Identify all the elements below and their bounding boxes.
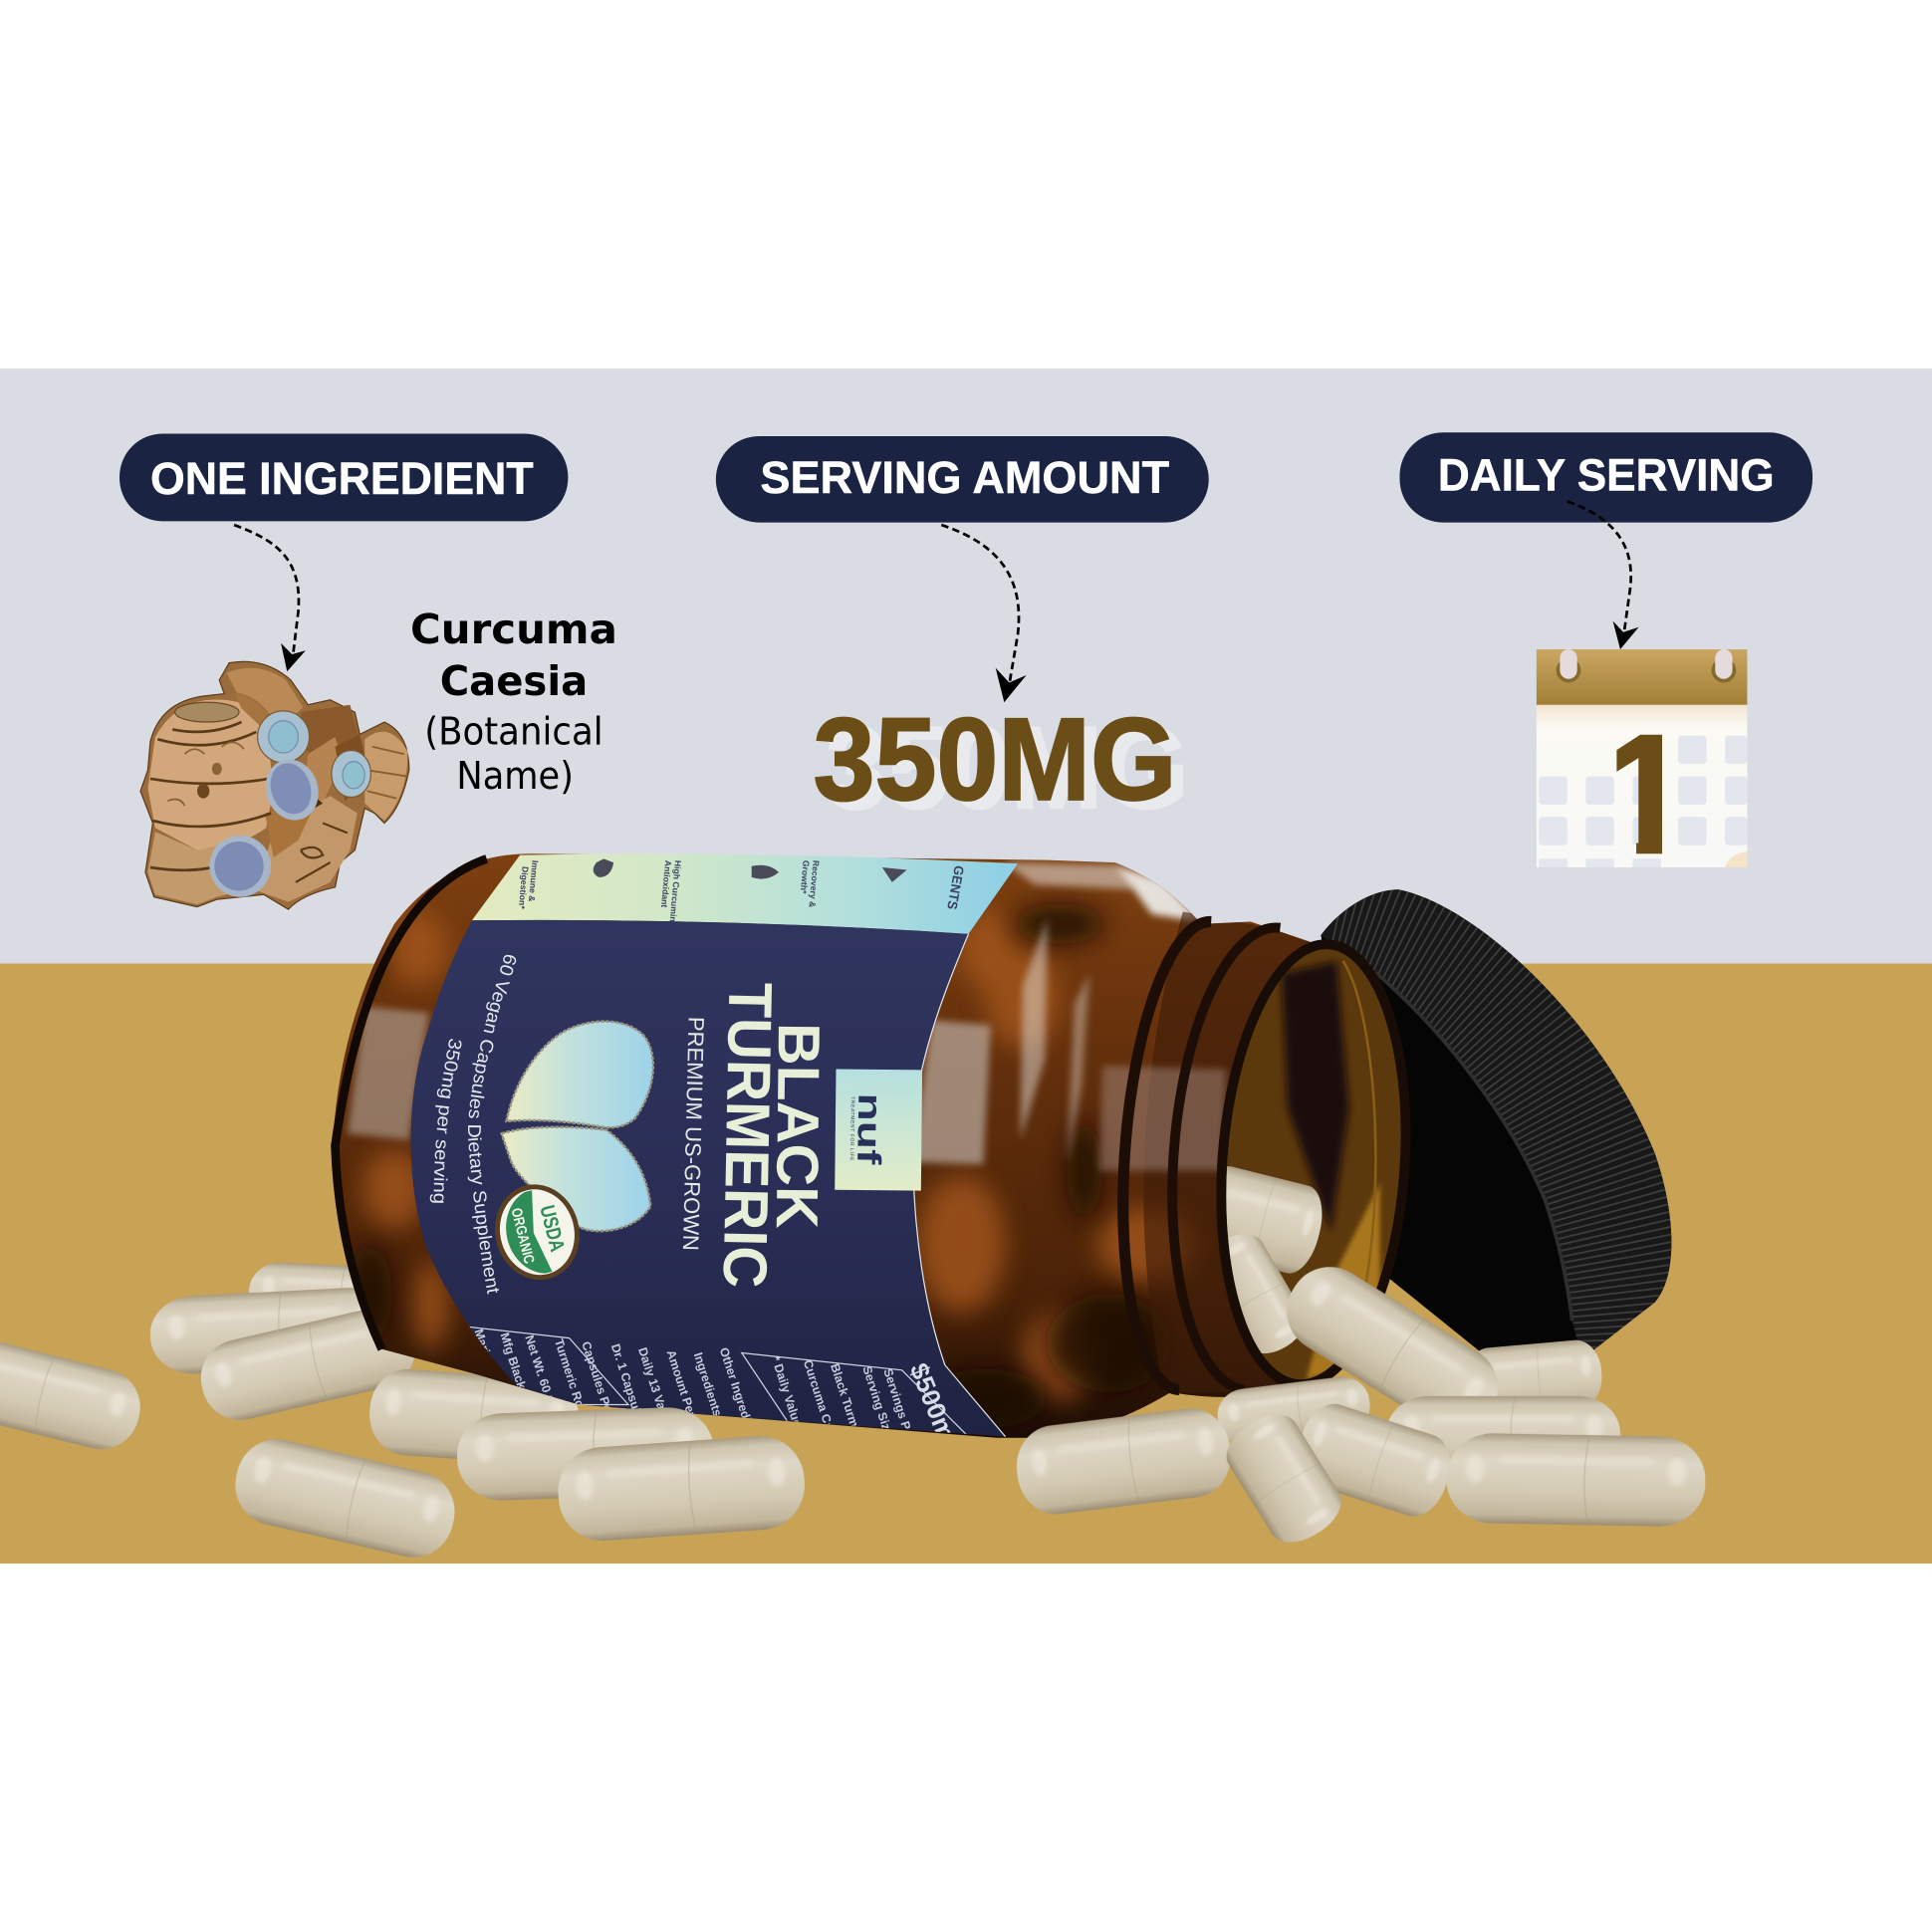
brand box	[835, 1069, 922, 1191]
label navy panel	[410, 920, 1006, 1437]
label light band	[472, 853, 1018, 934]
pill heading: one ingredient	[120, 434, 568, 521]
supplement facts text: Net Wt. 60 Caps	[522, 1333, 564, 1426]
botanical name text: (Botanical	[424, 709, 604, 754]
infographic canvas	[0, 368, 1932, 1564]
supplement facts text: Amount Per Serving	[663, 1348, 714, 1465]
grey background band	[0, 368, 1932, 965]
pill heading: serving amount: SERVING AMOUNT	[760, 452, 1169, 503]
dose per serving line: 350mg per serving	[430, 1039, 462, 1203]
label light band: GENTS	[944, 864, 967, 910]
lower fingers	[254, 796, 358, 902]
bottle mouth	[1216, 940, 1410, 1384]
brand box: TREATMENT FOR LIFE	[848, 1096, 855, 1161]
supplement facts text: Capsules Per Day	[579, 1339, 624, 1443]
rhizome cut disc 2	[258, 753, 326, 828]
botanical name text: Name)	[456, 754, 574, 799]
supplement facts text: Turmeric Root Powder	[552, 1337, 605, 1466]
arrow: to dose	[941, 525, 1027, 702]
capsule count and dietary line: 60 Vegan Capsules Dietary Supplement	[468, 954, 516, 1295]
tuber cracks	[150, 722, 271, 870]
botanical name text	[410, 605, 617, 799]
label light band: Digestion*	[517, 866, 531, 910]
arrow: to rhizome	[234, 525, 306, 671]
supplement facts text	[469, 1327, 967, 1434]
label light band: Growth*	[799, 859, 812, 894]
product name: BLACK	[764, 1023, 833, 1229]
supplement facts text: Other Ingredients	[717, 1345, 762, 1448]
product name	[710, 982, 833, 1289]
turmeric slice butterfly	[502, 1022, 653, 1231]
amber glass bottle	[281, 853, 1454, 1541]
panel: one ingredient	[120, 434, 617, 909]
botanical name text: Caesia	[440, 657, 588, 705]
USDA organic seal: USDA	[535, 1203, 569, 1254]
icon: black turmeric rhizome	[140, 661, 409, 909]
dose value: 350MG	[826, 703, 1189, 834]
supplement facts text: Curcuma Caesia	[801, 1358, 844, 1454]
gold background band	[0, 964, 1932, 1564]
supplement facts text: Mfg Black Turmeric	[497, 1331, 546, 1443]
neck shading	[1143, 912, 1319, 1392]
product label	[410, 854, 1018, 1437]
product name: TURMERIC	[710, 982, 784, 1289]
panel: daily serving	[1400, 432, 1812, 902]
rhizome silhouette	[140, 661, 409, 909]
icon: calendar with number 1	[1536, 649, 1747, 867]
supplement facts text: Black Turmeric Root	[828, 1361, 877, 1480]
supplement facts text: $500mg	[904, 1358, 968, 1459]
botanical name text: Curcuma	[410, 605, 617, 653]
icon: calendar with number 1: 1	[1596, 696, 1699, 902]
pill heading: serving amount	[716, 436, 1209, 523]
supplement facts text: Servings Per Container	[880, 1366, 936, 1501]
label light band: High Curcumin	[668, 859, 683, 922]
dose value: 350MG	[814, 694, 1177, 825]
glass reflections	[348, 862, 1201, 1164]
label light band: Recovery &	[807, 859, 822, 908]
supplement facts text: Marine Extract 1 Daily	[471, 1328, 525, 1453]
rhizome cut disc 1	[258, 711, 310, 763]
glass body	[321, 845, 1330, 1448]
label light band: Immune &	[527, 859, 540, 902]
supplement facts text: Dr. 1 Capsule	[608, 1342, 645, 1421]
supplement facts text: Ingredients Vegetable	[691, 1350, 744, 1476]
arrow: to calendar	[1568, 502, 1639, 649]
supplement facts text: * Daily Value	[769, 1354, 805, 1428]
brand box: nuf	[849, 1092, 887, 1166]
pill heading: daily serving: DAILY SERVING	[1438, 449, 1775, 500]
capsules behind bottle, left	[148, 1261, 582, 1467]
capsules inside mouth	[1226, 1166, 1323, 1354]
label light band: Antioxidant	[659, 859, 673, 908]
supplement facts text: Serving Size 1 Capsule	[859, 1364, 914, 1497]
USDA organic seal	[485, 1175, 590, 1289]
pill heading: daily serving	[1400, 432, 1812, 523]
pill heading: one ingredient: ONE INGREDIENT	[150, 453, 534, 504]
tagline: PREMIUM US-GROWN	[678, 1017, 709, 1251]
base rim	[336, 858, 487, 1349]
panel: serving amount	[716, 436, 1209, 834]
rhizome cut disc 4	[209, 836, 271, 897]
upper fingers	[301, 705, 360, 767]
supplement facts text: Daily 13 Value	[635, 1345, 674, 1428]
capsule scatter, front left	[0, 1328, 808, 1566]
USDA organic seal: ORGANIC	[507, 1207, 537, 1266]
big tuber	[147, 700, 274, 850]
capsule scatter, front right	[1012, 1251, 1706, 1554]
bottle cap	[1321, 889, 1671, 1371]
rhizome cut disc 3	[332, 750, 370, 797]
neck rings	[1123, 921, 1280, 1390]
